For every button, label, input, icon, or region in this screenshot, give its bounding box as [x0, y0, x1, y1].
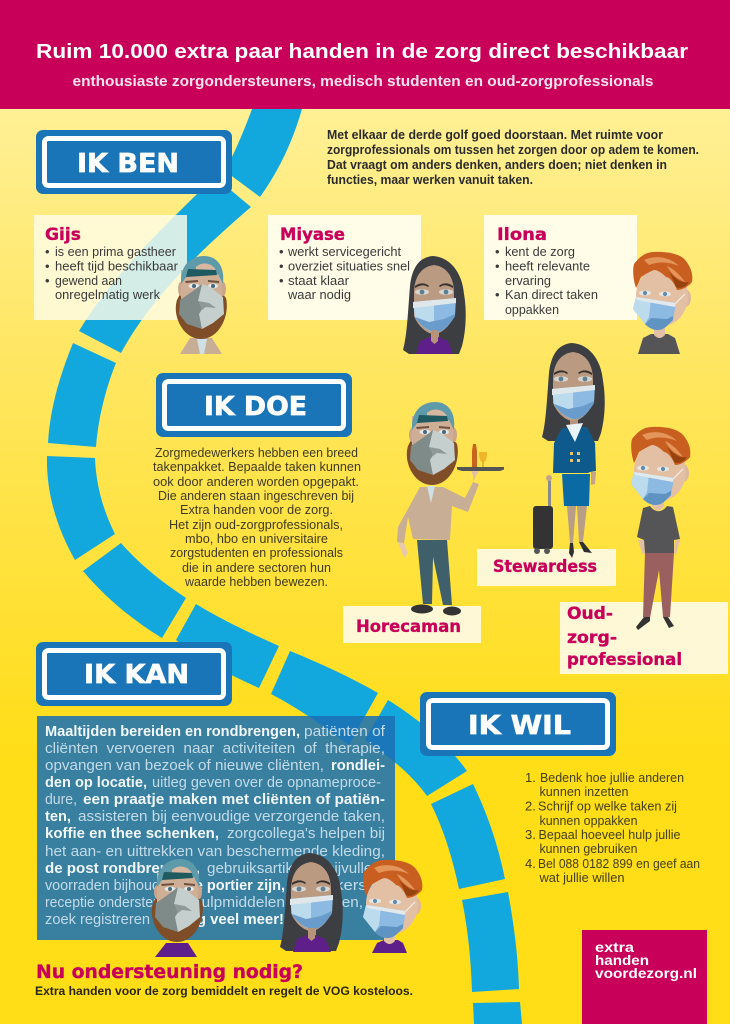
panel: ik kan tasks: receptie ondersteunen,: [45, 895, 188, 911]
sign: IK DOE: [156, 373, 352, 437]
sign: IK BEN: [36, 130, 232, 194]
label: Horecaman: [343, 606, 481, 643]
panel: Gijs: •: [45, 273, 50, 288]
panel: Ilona: heeft relevante: [505, 258, 590, 274]
header banner: [0, 0, 730, 109]
callout: nu ondersteuning nodig: Extra handen voor de zorg bemiddelt en regelt de VOG kosteloos.: [35, 986, 413, 998]
callout: nu ondersteuning nodig: Nu ondersteuning nodig?: [36, 961, 303, 983]
panel: Ilona: [484, 215, 637, 320]
panel: Miyase: staat klaar: [288, 273, 350, 288]
sign: IK WIL: IK WIL: [468, 711, 571, 741]
list: ik wil steps: kunnen oppakken: [540, 813, 638, 828]
intro text: [327, 128, 699, 187]
panel: ik kan tasks: een praatje maken met cliënten of patiën-: [83, 792, 385, 808]
title: Ruim 10.000 extra paar handen in de zorg direct beschikbaar: [36, 41, 688, 63]
panel: ik kan tasks: bezoekers of: [290, 878, 386, 894]
list: ik wil steps: Bepaal hoeveel hulp jullie: [538, 827, 680, 842]
panel: Ilona: •: [495, 258, 500, 274]
panel: ik kan tasks: hulpmiddelen: [193, 895, 285, 911]
panel: Gijs: gewend aan: [55, 273, 122, 288]
panel: ik kan tasks: [37, 716, 395, 940]
panel: ik kan tasks: rondlei-: [331, 758, 385, 774]
sign: IK KAN: IK KAN: [84, 660, 189, 690]
list: ik wil steps: 3.: [525, 827, 536, 842]
panel: ik kan tasks: de post rondbrengen,: [45, 861, 200, 877]
portrait: Gijs: [176, 256, 227, 354]
panel: Gijs: •: [45, 244, 50, 259]
panel: ik kan tasks: zoek registreren: [45, 912, 150, 928]
text: ik doe description: [153, 445, 361, 589]
list: ik wil steps: Bel 088 0182 899 en geef aan: [538, 856, 700, 871]
sign: IK WIL: [420, 692, 616, 756]
label: Stewardess: [477, 549, 616, 586]
sign: IK DOE: IK DOE: [204, 392, 307, 422]
list: ik wil steps: [525, 770, 700, 885]
panel: ik kan tasks: assisteren bij eenvoudige verzorgende taken,: [78, 809, 385, 825]
panel: Gijs: •: [45, 258, 50, 274]
figure: oud-zorgprofessional: [631, 427, 690, 630]
panel: Ilona: kent de zorg: [505, 244, 575, 259]
text: ik doe description: Die anderen staan ingeschreven bij: [158, 488, 354, 503]
text: ik doe description: die in andere sectoren hun: [182, 560, 331, 575]
text: ik doe description: Extra handen voor de zorg.: [180, 502, 333, 517]
panel: ik kan tasks: patiënten of: [304, 724, 386, 740]
panel: ik kan tasks: ten,: [45, 809, 71, 825]
list: ik wil steps: 2.: [525, 798, 536, 814]
label: Horecaman: Horecaman: [356, 617, 461, 637]
text: ik doe description: waarde hebben bewezen.: [184, 574, 328, 589]
list: ik wil steps: kunnen inzetten: [540, 784, 628, 799]
intro text: zorgprofessionals om tussen het zorgen door op adem te komen.: [327, 143, 699, 157]
portrait: Miyase: [403, 256, 466, 354]
panel: Miyase: waar nodig: [287, 287, 351, 302]
panel: ik kan tasks: voorraden bijhouden,: [45, 878, 180, 894]
list: ik wil steps: Schrijf op welke taken zij: [538, 798, 677, 814]
figure: horecaman with tray: [397, 402, 504, 616]
panel: Gijs: onregelmatig werk: [55, 287, 160, 302]
portrait: Ilona: [633, 252, 692, 354]
panel: ik kan tasks: de portier zijn,: [186, 878, 285, 894]
portrait: man in purple: [152, 859, 203, 957]
panel: Ilona: Kan direct taken: [505, 287, 598, 302]
list: ik wil steps: 4.: [525, 856, 536, 871]
panel: Gijs: is een prima gastheer: [55, 244, 177, 259]
sign: IK KAN: [36, 642, 232, 706]
panel: Gijs: Gijs: [45, 225, 81, 245]
road: winding blue path: [47, 109, 522, 1024]
panel: Gijs: [34, 215, 187, 320]
logo block: handen: [595, 952, 649, 968]
panel: ik kan tasks: dure,: [45, 792, 77, 808]
text: ik doe description: zorgstudenten en professionals: [170, 545, 343, 560]
panel: Miyase: overziet situaties snel: [288, 258, 410, 274]
panel: ik kan tasks: den op locatie,: [45, 775, 147, 791]
panel: Miyase: •: [279, 258, 284, 274]
panel: Gijs: heeft tijd beschikbaar: [55, 258, 179, 274]
label: Oud-zorg-professional: Oud-: [567, 604, 613, 624]
logo block: [582, 930, 707, 1024]
panel: Miyase: •: [279, 244, 284, 259]
figure: stewardess with suitcase: [533, 343, 605, 558]
panel: ik kan tasks: opvangen van bezoek of nieuwe cliënten,: [45, 758, 324, 774]
list: ik wil steps: wat jullie willen: [539, 870, 624, 885]
panel: ik kan tasks: het aan- en uittrekken van beschermende kleding,: [45, 844, 385, 860]
text: ik doe description: ook door anderen worden opgepakt.: [153, 474, 359, 489]
callout: nu ondersteuning nodig: [35, 961, 413, 998]
portrait: red hair woman in purple: [363, 860, 422, 953]
label: Oud-zorg-professional: zorg-: [567, 628, 617, 648]
panel: ik kan tasks: verzorgen,: [291, 895, 363, 911]
panel: Miyase: [268, 215, 421, 320]
panel: Miyase: Miyase: [280, 225, 345, 245]
intro text: functies, maar werken vanuit taken.: [327, 173, 533, 187]
panel: ik kan tasks: en nog veel meer!: [157, 912, 284, 928]
panel: Ilona: oppakken: [505, 302, 559, 317]
panel: ik kan tasks: be-: [369, 895, 385, 911]
list: ik wil steps: kunnen gebruiken: [540, 841, 638, 856]
panel: Miyase: •: [279, 273, 284, 288]
sign: IK BEN: IK BEN: [77, 149, 179, 179]
panel: ik kan tasks: koffie en thee schenken,: [45, 826, 219, 842]
panel: ik kan tasks: cliënten vervoeren naar activiteiten of therapie,: [45, 741, 385, 757]
panel: Miyase: werkt servicegericht: [287, 244, 401, 259]
text: ik doe description: Zorgmedewerkers hebben een breed: [155, 445, 358, 460]
panel: ik kan tasks: gebruiksartikelen bijvullen,: [207, 861, 385, 877]
label: Oud-zorg-professional: [560, 602, 728, 674]
intro text: Met elkaar de derde golf goed doorstaan. Met ruimte voor: [327, 128, 663, 142]
panel: Ilona: •: [495, 287, 500, 302]
label: Oud-zorg-professional: professional: [567, 650, 682, 670]
logo block: voordezorg.nl: [595, 965, 697, 981]
subtitle: enthousiaste zorgondersteuners, medisch studenten en oud-zorgprofessionals: [72, 74, 654, 90]
panel: Ilona: ervaring: [505, 273, 551, 288]
text: ik doe description: Het zijn oud-zorgprofessionals,: [169, 517, 343, 532]
panel: ik kan tasks: uitleg geven over de opnameproce-: [152, 775, 381, 791]
panel: Ilona: Ilona: [497, 225, 547, 245]
panel: ik kan tasks: Maaltijden bereiden en rondbrengen,: [45, 724, 300, 740]
label: Stewardess: Stewardess: [493, 557, 597, 577]
panel: ik kan tasks: zorgcollega's helpen bij: [227, 826, 385, 842]
list: ik wil steps: 1.: [525, 770, 536, 785]
intro text: Dat vraagt om anders denken, anders doen; niet denken in: [327, 158, 667, 172]
text: ik doe description: takenpakket. Bepaalde taken kunnen: [153, 459, 361, 474]
text: ik doe description: mbo, hbo en universitaire: [185, 531, 328, 546]
panel: Ilona: •: [495, 244, 500, 259]
list: ik wil steps: Bedenk hoe jullie anderen: [540, 770, 684, 785]
portrait: woman in purple: [280, 853, 343, 952]
logo block: extra: [595, 939, 634, 955]
